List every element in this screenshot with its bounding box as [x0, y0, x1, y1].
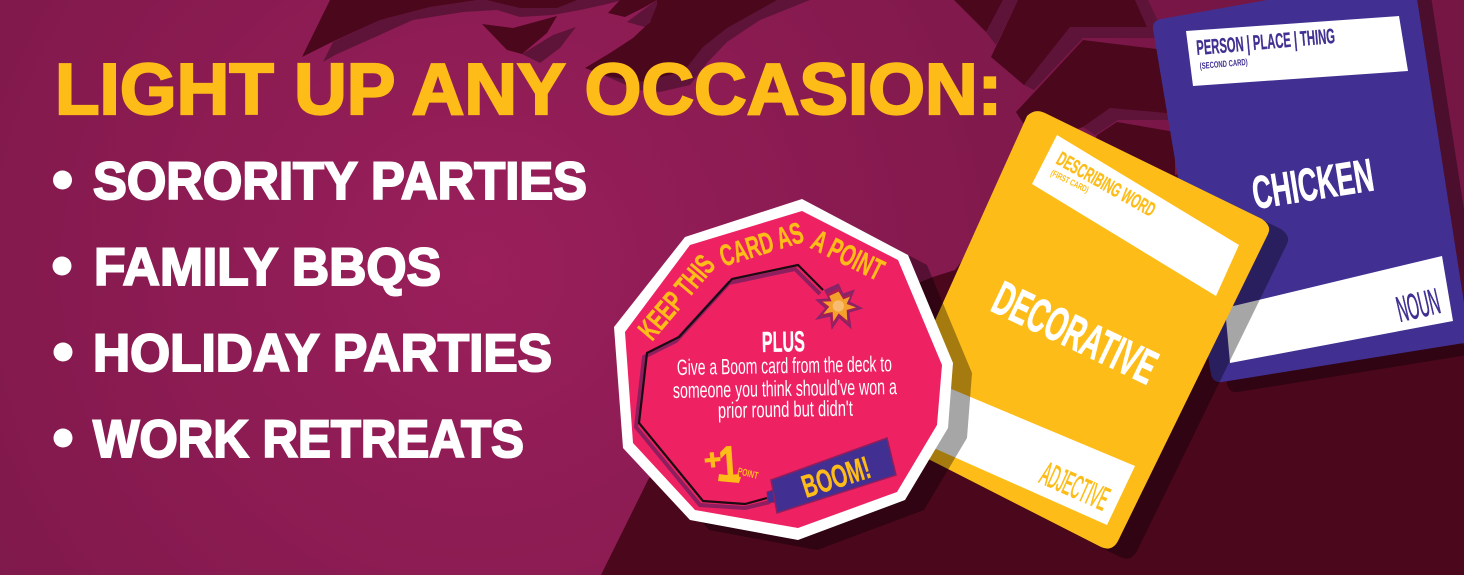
card instruction text: someone you think should've won a — [673, 374, 898, 403]
list item: sorority parties: SORORITY PARTIES — [93, 152, 587, 211]
card instruction text: prior round but didn't — [718, 396, 853, 423]
boom firecracker label: BOOM! — [797, 449, 875, 505]
list item: family bbqs: FAMILY BBQS — [94, 238, 441, 297]
plus one point badge: 1 — [717, 437, 741, 492]
card: blue noun card: CHICKEN — [1248, 148, 1377, 219]
card: pink boom octagon — [614, 199, 972, 550]
plus one point badge — [702, 437, 759, 492]
list item: work retreats: WORK RETREATS — [93, 410, 524, 469]
card: yellow adjective card: (FIRST CARD) — [1049, 168, 1090, 195]
card instruction text — [673, 326, 898, 423]
card: yellow adjective card — [883, 111, 1288, 559]
card: blue noun card: (SECOND CARD) — [1199, 57, 1248, 71]
title: LIGHT UP ANY OCCASION: — [55, 50, 1002, 130]
card instruction text: Give a Boom card from the deck to — [677, 351, 892, 380]
icon: spark explosion — [815, 283, 863, 330]
card: yellow adjective card: ADJECTIVE — [1035, 455, 1115, 517]
card: yellow adjective card: DESCRIBING WORD — [1053, 148, 1159, 222]
occasions list — [52, 152, 587, 469]
background silhouette shapes — [302, 0, 1464, 575]
card: blue noun card: PERSON | PLACE | THING — [1195, 25, 1336, 60]
card: yellow adjective card: DECORATIVE — [984, 272, 1165, 395]
card: blue noun card — [1153, 0, 1464, 392]
boom firecracker label — [767, 438, 896, 513]
fuse — [636, 265, 823, 508]
curved heading: keep this card as a point: KEEP THIS CARD AS A POINT — [636, 222, 887, 342]
card instruction text: PLUS — [762, 326, 805, 359]
plus one point badge: POINT — [736, 466, 759, 482]
list item: holiday parties: HOLIDAY PARTIES — [93, 324, 552, 383]
plus one point badge: + — [702, 443, 723, 476]
